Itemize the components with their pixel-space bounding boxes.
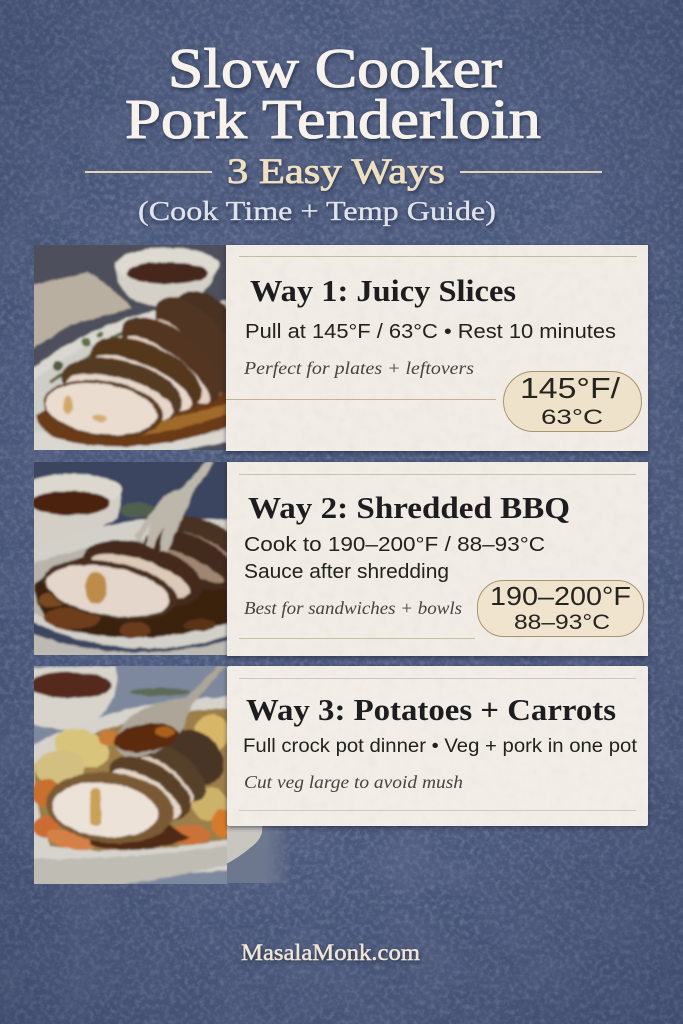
text: pull temperature and rest: Pull at 145°F / 63°C • Rest 10 minutes bbox=[245, 321, 616, 343]
photo: juicy pork slices on plate bbox=[34, 245, 226, 450]
badge: 145F 63C: 145°F/ bbox=[520, 373, 621, 405]
badge: 190-200F 88-93C: 88–93°C bbox=[514, 611, 610, 634]
title bbox=[125, 38, 541, 151]
subheading: cook time and temp guide: (Cook Time + Temp Guide) bbox=[138, 196, 496, 226]
heading: way 1: Way 1: Juicy Slices bbox=[250, 273, 516, 308]
text: veg tip: Cut veg large to avoid mush bbox=[244, 772, 463, 792]
panel: way 3 potatoes and carrots bbox=[227, 666, 648, 826]
panel: way 2 shredded bbq bbox=[227, 462, 648, 656]
badge: 190-200F 88-93C bbox=[478, 580, 644, 636]
heading: way 2: Way 2: Shredded BBQ bbox=[248, 490, 570, 525]
text: serving note: Perfect for plates + leftovers bbox=[243, 358, 474, 378]
heading: way 3: Way 3: Potatoes + Carrots bbox=[246, 692, 616, 727]
subtitle: 3 Easy Ways with side rules: 3 Easy Ways bbox=[227, 151, 445, 191]
badge: 190-200F 88-93C: 190–200°F bbox=[490, 581, 631, 611]
badge: 145F 63C bbox=[504, 372, 642, 432]
title: Pork Tenderloin bbox=[125, 89, 541, 151]
text: cook temperature: Cook to 190–200°F / 88–93°C bbox=[244, 534, 545, 556]
badge: 145F 63C: 63°C bbox=[541, 406, 603, 429]
fabric and dish edge right of photo bbox=[226, 826, 292, 883]
footer: website: MasalaMonk.com bbox=[241, 940, 420, 965]
potatoes bbox=[54, 728, 110, 769]
carrots bbox=[34, 778, 58, 808]
text: full crock pot dinner: Full crock pot dinner • Veg + pork in one pot bbox=[243, 736, 638, 757]
fork bbox=[133, 462, 214, 552]
spoon bbox=[116, 666, 226, 756]
pork slices bbox=[90, 825, 190, 850]
slices back to front bbox=[178, 290, 226, 338]
panel: way 1 juicy slices bbox=[226, 245, 648, 451]
text: serving note: Best for sandwiches + bowls bbox=[244, 598, 462, 618]
text: sauce after shredding: Sauce after shredding bbox=[244, 561, 449, 583]
photo: shredded bbq pork in dish with fork bbox=[34, 462, 227, 655]
title: Slow Cooker bbox=[168, 38, 502, 100]
photo: pork with potatoes and carrots bbox=[34, 666, 227, 884]
